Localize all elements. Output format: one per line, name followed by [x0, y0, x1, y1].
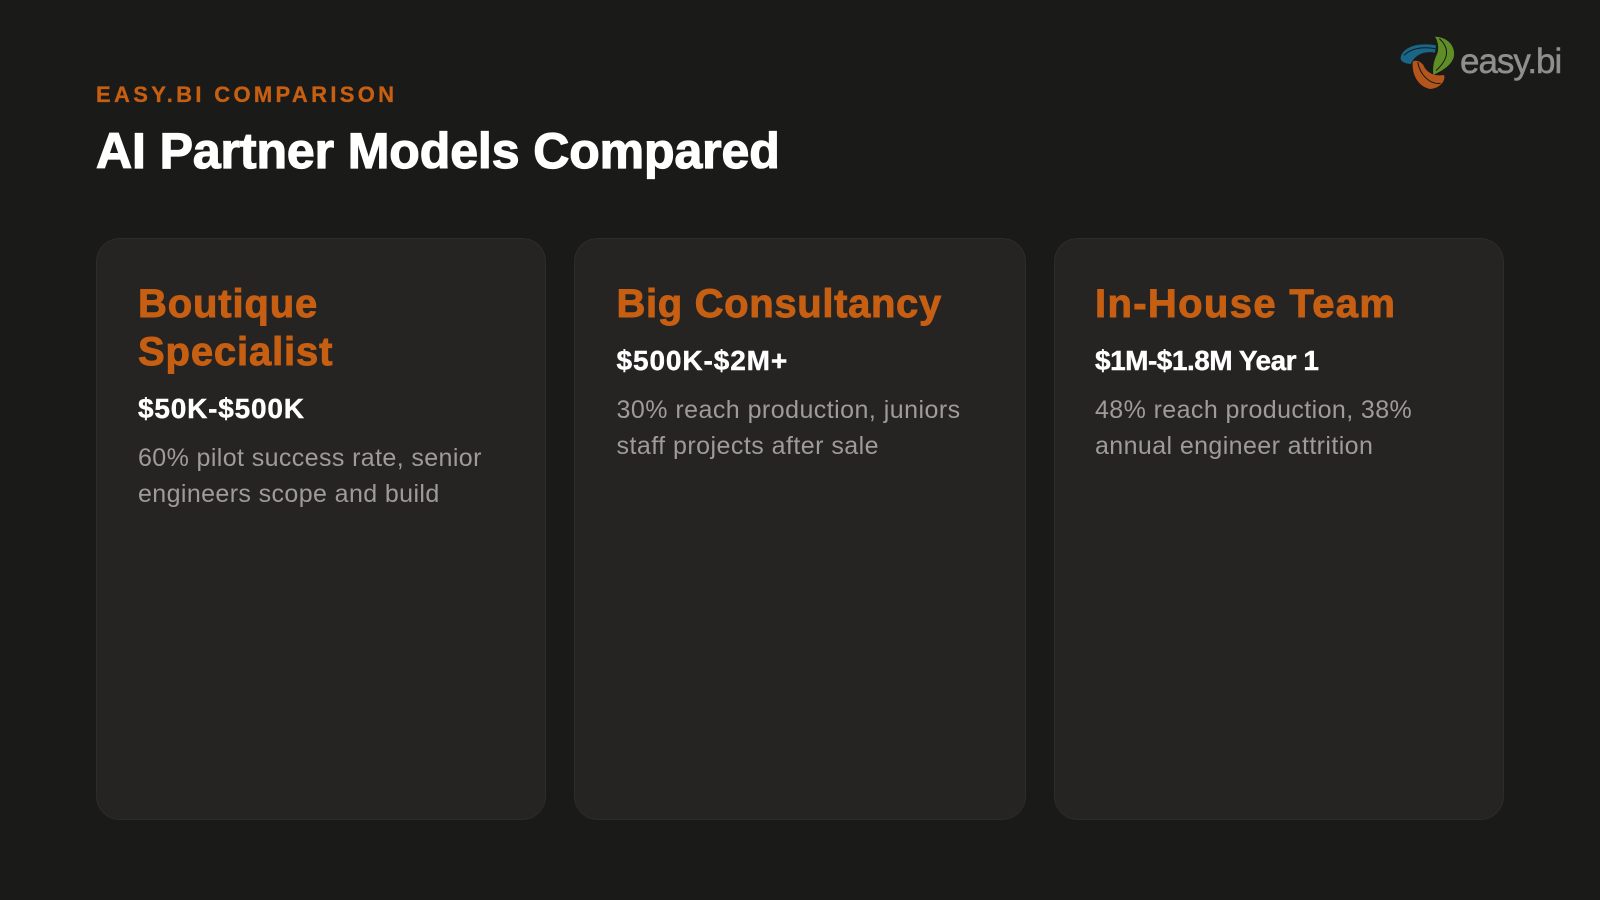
description — [138, 444, 482, 508]
panel: In-House Team — [1054, 238, 1504, 820]
panel heading: Big Consultancy — [616, 282, 942, 326]
logo wordmark: easy.bi — [1460, 42, 1561, 81]
price: $500K-$2M+ — [616, 345, 788, 376]
description — [616, 396, 961, 460]
price: $1M-$1.8M Year 1 — [1095, 345, 1318, 376]
price: $50K-$500K — [138, 393, 305, 424]
description: annual engineer attrition — [1095, 432, 1373, 460]
panel: Big Consultancy — [574, 238, 1026, 820]
description: engineers scope and build — [138, 480, 440, 508]
logo mark — [1400, 36, 1454, 89]
description: 48% reach production, 38% — [1095, 396, 1412, 424]
description: staff projects after sale — [616, 432, 879, 460]
description — [1095, 396, 1412, 460]
panel heading: In-House Team — [1095, 282, 1396, 326]
title: AI Partner Models Compared — [96, 123, 780, 179]
description: 60% pilot success rate, senior — [138, 444, 482, 472]
description: 30% reach production, juniors — [616, 396, 961, 424]
logo: easy.bi — [1400, 36, 1561, 89]
panel heading: Boutique — [138, 282, 318, 326]
panel heading — [138, 282, 333, 374]
eyebrow: EASY.BI COMPARISON — [96, 82, 397, 107]
panel heading: Specialist — [138, 330, 333, 374]
panel: Boutique Specialist — [96, 238, 546, 820]
